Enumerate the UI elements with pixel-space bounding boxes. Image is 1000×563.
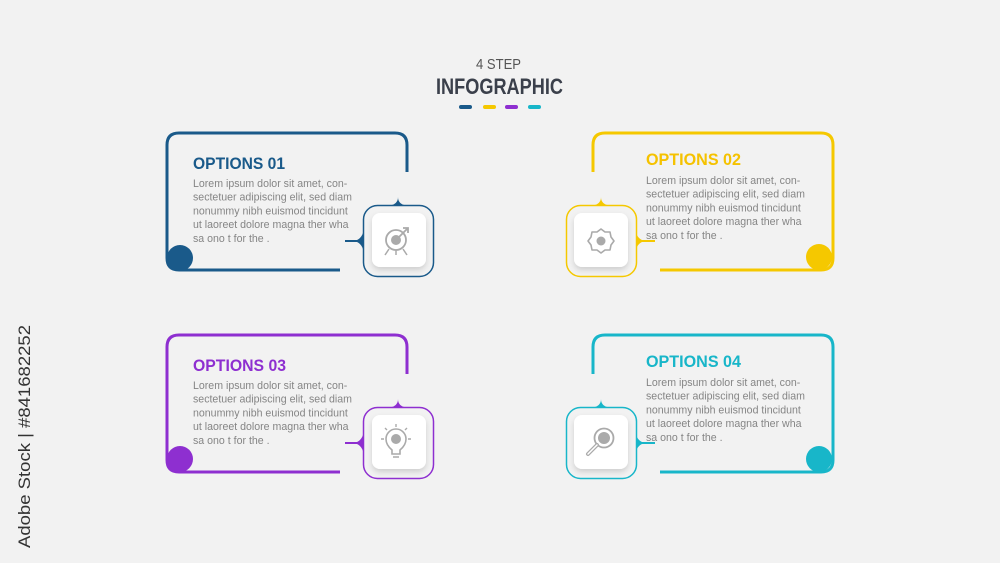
panel: options 01 [167,133,434,276]
body text 03: Lorem ipsum dolor sit amet, con- [193,380,348,392]
title: 4 STEP [476,56,521,73]
body text 03: ut laoreet dolore magna ther wha [193,421,349,433]
body text 03: sa ono t for the . [193,435,270,447]
body text 03: nonummy nibh euismod tincidunt [193,407,348,419]
icon box: gear [566,197,655,276]
side watermark text: Adobe Stock | #841682252 [15,325,34,548]
body text 04: ut laoreet dolore magna ther wha [646,418,802,430]
title: INFOGRAPHIC [436,74,563,99]
body text 04: sectetuer adipiscing elit, sed diam [646,391,805,403]
title [436,56,563,99]
panel: options 04 [566,335,833,478]
body text 04: nonummy nibh euismod tincidunt [646,404,801,416]
heading: options 02: OPTIONS 02 [646,150,741,169]
body text 01: nonummy nibh euismod tincidunt [193,205,348,217]
heading: options 04: OPTIONS 04 [646,352,742,371]
body text 01: sectetuer adipiscing elit, sed diam [193,192,352,204]
body text 02: Lorem ipsum dolor sit amet, con- [646,175,801,187]
heading: options 03: OPTIONS 03 [193,356,286,375]
color dashes [461,105,539,109]
body text 03: sectetuer adipiscing elit, sed diam [193,394,352,406]
icon box: bulb [345,399,434,478]
body text 04: sa ono t for the . [646,432,723,444]
body text 02: ut laoreet dolore magna ther wha [646,216,802,228]
body text 01: ut laoreet dolore magna ther wha [193,219,349,231]
icon box: magnifier [566,399,655,478]
panel: options 02 [566,133,833,276]
body text 01: sa ono t for the . [193,233,270,245]
heading: options 01: OPTIONS 01 [193,154,285,173]
body text 01: Lorem ipsum dolor sit amet, con- [193,178,348,190]
icon box: target [345,197,434,276]
body text 02: nonummy nibh euismod tincidunt [646,202,801,214]
body text 02: sectetuer adipiscing elit, sed diam [646,189,805,201]
panel: options 03 [167,335,434,478]
body text 04: Lorem ipsum dolor sit amet, con- [646,377,801,389]
body text 02: sa ono t for the . [646,230,723,242]
